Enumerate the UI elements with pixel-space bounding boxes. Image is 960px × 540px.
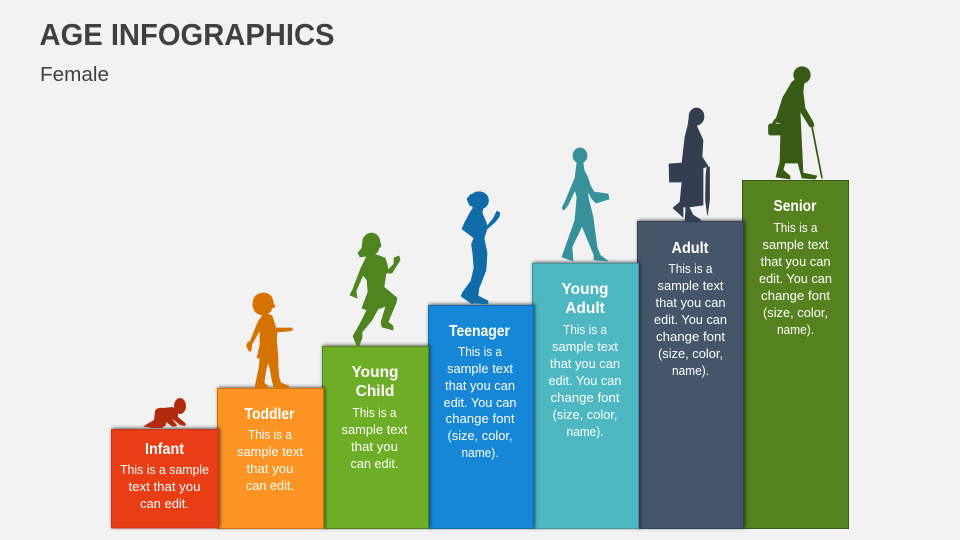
text: teenager description: change font bbox=[446, 412, 515, 426]
text: adult description: name). bbox=[672, 364, 709, 378]
step: young adult bbox=[532, 148, 638, 528]
text: adult description: change font bbox=[656, 330, 726, 344]
text: teenager description: edit. You can bbox=[444, 396, 517, 410]
text: infant description: This is a sample bbox=[120, 463, 209, 477]
icon: infant silhouette bbox=[143, 398, 186, 428]
text: teenager description bbox=[444, 345, 517, 460]
text: young adult description: edit. You can bbox=[548, 374, 622, 388]
heading: young child: Young bbox=[351, 364, 399, 381]
text: toddler description bbox=[237, 428, 304, 493]
text: teenager description: (size, color, bbox=[448, 429, 512, 443]
step: toddler bbox=[218, 293, 324, 528]
text: senior description: change font bbox=[761, 289, 831, 303]
text: toddler description: sample text bbox=[237, 445, 304, 459]
text: young adult description: change font bbox=[550, 391, 620, 405]
text: young adult description: name). bbox=[566, 425, 604, 439]
step: adult bbox=[638, 108, 744, 528]
heading: senior: Senior bbox=[774, 198, 816, 215]
step: teenager bbox=[428, 192, 534, 528]
text: adult description: (size, color, bbox=[658, 347, 723, 361]
text: senior description: (size, color, bbox=[763, 306, 828, 320]
text: adult description bbox=[654, 262, 727, 378]
text: adult description: that you can bbox=[656, 296, 726, 310]
text: teenager description: that you can bbox=[445, 379, 515, 393]
text: teenager description: This is a bbox=[458, 345, 502, 359]
text: infant description: text that you bbox=[128, 480, 201, 494]
text: young adult description bbox=[548, 323, 622, 439]
text: toddler description: This is a bbox=[248, 428, 292, 442]
heading: young adult: Adult bbox=[565, 300, 605, 317]
step: infant bbox=[112, 398, 218, 528]
text: senior description: sample text bbox=[762, 238, 829, 252]
text: toddler description: can edit. bbox=[246, 479, 294, 493]
step: senior bbox=[742, 67, 848, 528]
icon: young adult woman silhouette bbox=[562, 148, 609, 261]
text: senior description: name). bbox=[777, 323, 814, 337]
icon: young child silhouette bbox=[350, 233, 400, 346]
text: senior description: edit. You can bbox=[759, 272, 832, 286]
text: young child description: can edit. bbox=[350, 457, 398, 471]
icon: senior woman silhouette bbox=[768, 67, 822, 179]
subtitle: Female bbox=[40, 64, 109, 86]
text: toddler description: that you bbox=[246, 462, 294, 476]
text: senior description bbox=[759, 221, 832, 337]
heading: adult: Adult bbox=[672, 240, 708, 257]
text: young child description bbox=[342, 406, 408, 471]
text: teenager description: sample text bbox=[447, 362, 514, 376]
text: adult description: sample text bbox=[658, 279, 724, 293]
text: young child description: sample text bbox=[342, 423, 408, 437]
text: infant description: can edit. bbox=[140, 497, 189, 511]
text: adult description: This is a bbox=[668, 262, 713, 276]
text: young adult description: that you can bbox=[550, 357, 620, 371]
text: young adult description: sample text bbox=[552, 340, 619, 354]
icon: adult woman silhouette bbox=[669, 108, 710, 222]
heading: teenager: Teenager bbox=[449, 323, 510, 340]
title: AGE INFOGRAPHICS bbox=[40, 17, 334, 52]
icon: teenager silhouette bbox=[461, 192, 500, 304]
text: adult description: edit. You can bbox=[654, 313, 727, 327]
text: senior description: that you can bbox=[760, 255, 831, 269]
text: teenager description: name). bbox=[462, 446, 498, 460]
icon: toddler silhouette bbox=[246, 293, 292, 388]
text: young child description: that you bbox=[351, 440, 398, 454]
step: young child bbox=[322, 233, 428, 528]
text: senior description: This is a bbox=[774, 221, 818, 235]
text: young adult description: (size, color, bbox=[552, 408, 618, 422]
heading: toddler: Toddler bbox=[244, 406, 294, 423]
text: young adult description: This is a bbox=[563, 323, 607, 337]
heading: infant: Infant bbox=[145, 441, 184, 458]
heading: young child: Child bbox=[356, 383, 394, 400]
text: infant description bbox=[120, 463, 209, 511]
text: young child description: This is a bbox=[352, 406, 397, 420]
heading: young adult: Young bbox=[561, 281, 609, 298]
